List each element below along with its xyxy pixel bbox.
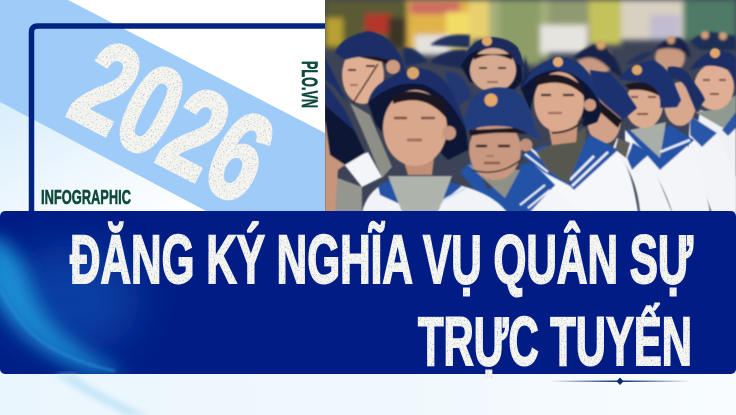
- soldier: right: [619, 60, 710, 212]
- year 2026: 2026: [52, 15, 294, 230]
- soldier: far left edge: [325, 57, 382, 212]
- divider ornament: [550, 378, 690, 385]
- soldier: right rear: [664, 67, 736, 212]
- photo: soldiers in navy uniforms: [325, 0, 736, 212]
- band light swoosh: [0, 235, 140, 374]
- background hats: [403, 31, 736, 106]
- frame: [32, 26, 325, 212]
- source label PLO.VN: PLO.VN: [297, 61, 322, 108]
- panel: 2026 cover: [0, 0, 325, 230]
- soldier: front centre-left: [460, 86, 561, 211]
- pale streak under band: [55, 375, 150, 415]
- soldier: profile behind centre: [587, 70, 672, 212]
- soldier: front left: [362, 67, 507, 212]
- label INFOGRAPHIC: INFOGRAPHIC: [41, 187, 131, 209]
- soldier: back centre: [461, 36, 526, 92]
- soldier: centre: [521, 57, 638, 212]
- soldier: right rear far: [690, 48, 736, 212]
- soldier: back left: [335, 31, 405, 178]
- blurred festival backdrop: [325, 0, 736, 65]
- title band: [0, 211, 736, 380]
